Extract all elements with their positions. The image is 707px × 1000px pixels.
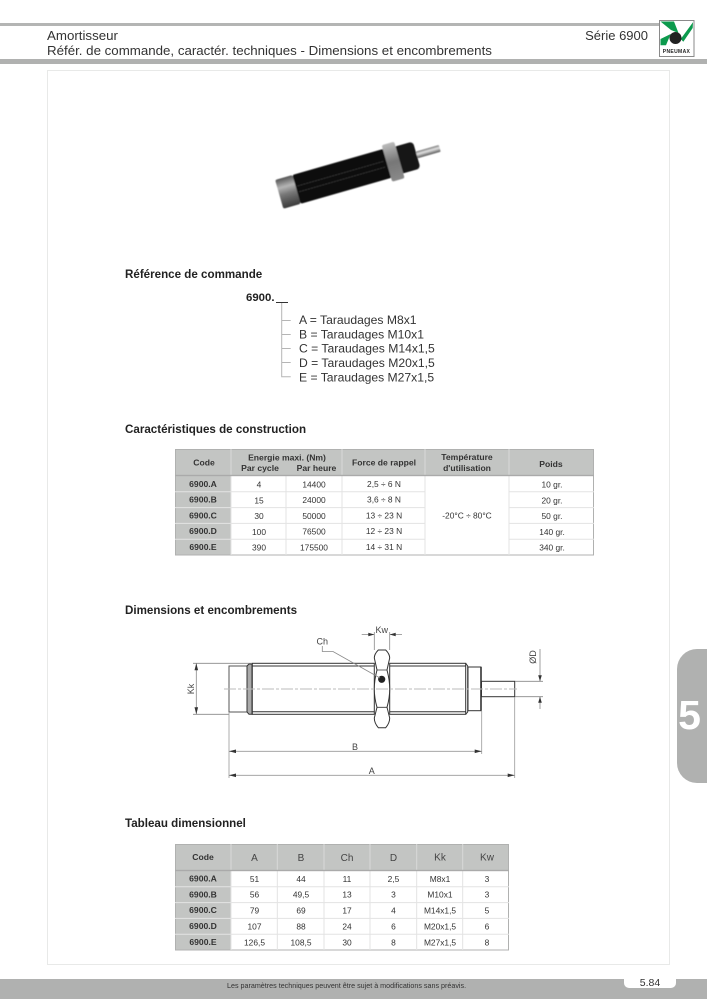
table: dimensions: M8x1 — [430, 874, 451, 884]
table: dimensions: 88 — [296, 922, 306, 932]
table: dimensions: 79 — [250, 906, 259, 916]
table: caractéristiques: 2,5 ÷ 6 N — [367, 479, 401, 489]
table: dimensions: 49,5 — [293, 890, 309, 900]
dimension OD — [515, 649, 543, 709]
table: caractéristiques: 340 gr. — [539, 542, 565, 552]
table: dimensions: M27x1,5 — [424, 938, 456, 948]
table: dimensions: 6 — [391, 922, 396, 932]
table: caractéristiques: d'utilisation — [443, 463, 491, 473]
technical drawing — [186, 625, 543, 778]
table: dimensions: 126,5 — [244, 938, 265, 948]
table: dimensions: 6900.E — [189, 937, 217, 947]
table: caractéristiques: 12 ÷ 23 N — [366, 526, 402, 536]
table: caractéristiques: Code — [193, 458, 215, 468]
table: caractéristiques: 24000 — [302, 495, 326, 505]
page number: 5.84 — [640, 977, 660, 989]
footer note: Les paramètres techniques peuvent être sujet à modifications sans préavis. — [227, 982, 466, 990]
header title block: Référ. de commande, caractér. techniques - Dimensions et encombrements — [47, 43, 492, 58]
heading: dimensions et encombrements: Dimensions et encombrements — [125, 604, 297, 617]
dimension Kw — [362, 625, 402, 650]
header title block: Amortisseur — [47, 28, 118, 42]
table: dimensions: A — [251, 853, 258, 864]
header title block — [47, 28, 492, 58]
header lower band — [0, 59, 707, 64]
table: caractéristiques: 6900.A — [189, 479, 217, 489]
table: dimensions: 69 — [296, 906, 306, 916]
table: dimensions — [175, 844, 509, 950]
table: caractéristiques: 10 gr. — [542, 480, 562, 490]
table: dimensions: 11 — [343, 874, 352, 884]
table: caractéristiques: 6900.B — [189, 494, 217, 504]
table: caractéristiques: 30 — [254, 511, 264, 521]
table: caractéristiques: 6900.D — [189, 526, 217, 536]
order code tree: D = Taraudages M20x1,5 — [299, 356, 435, 370]
table: dimensions: M14x1,5 — [424, 906, 456, 916]
order code tree: 6900. — [246, 292, 275, 304]
table: caractéristiques: 6900.E — [189, 542, 217, 552]
table: dimensions: 107 — [248, 922, 262, 932]
main panel — [47, 70, 670, 965]
table: dimensions: 3 — [391, 890, 396, 900]
table: dimensions: 2,5 — [388, 874, 400, 884]
heading: caractéristiques de construction: Caractéristiques de construction — [125, 423, 306, 436]
table: dimensions: 8 — [485, 938, 490, 948]
table: caractéristiques: 20 gr. — [542, 496, 562, 506]
dimension OD: ØD — [528, 650, 538, 664]
table: caractéristiques: Poids — [539, 459, 563, 469]
heading: tableau dimensionnel: Tableau dimensionnel — [125, 817, 246, 830]
dimension B — [229, 711, 482, 778]
table: dimensions: 6900.D — [189, 921, 217, 931]
table: dimensions: 6900.A — [189, 874, 217, 884]
table: dimensions: Kk — [434, 852, 447, 864]
table: dimensions: Code — [192, 852, 214, 862]
table: dimensions: D — [390, 853, 397, 864]
table: caractéristiques: Force de rappel — [352, 458, 416, 468]
detail dot — [378, 676, 385, 683]
side chapter tab — [677, 649, 707, 783]
table: dimensions: 6 — [485, 922, 490, 932]
table: caractéristiques: 175500 — [300, 542, 328, 552]
dimension Kk: Kk — [186, 683, 196, 694]
series label: Série 6900 — [585, 28, 648, 42]
table: dimensions: 5 — [485, 906, 490, 916]
dimension Ch: Ch — [317, 636, 328, 646]
table: caractéristiques: 3,6 ÷ 8 N — [367, 494, 401, 504]
dimension A — [229, 697, 515, 778]
table: caractéristiques: 100 — [252, 527, 266, 537]
table: dimensions: B — [298, 853, 305, 864]
order code tree: A = Taraudages M8x1 — [299, 313, 417, 327]
table: dimensions: 3 — [485, 874, 490, 884]
table: dimensions: 4 — [391, 906, 396, 916]
table: dimensions: 3 — [485, 890, 490, 900]
table: caractéristiques: 15 — [254, 496, 264, 506]
table: dimensions: 56 — [250, 890, 259, 900]
centre line — [224, 688, 517, 690]
logo: Pneumax: PNEUMAX — [663, 49, 691, 55]
order code tree: B = Taraudages M10x1 — [299, 327, 424, 341]
footer band — [0, 979, 707, 999]
table: dimensions: 24 — [342, 922, 352, 932]
table: caractéristiques: 14400 — [302, 480, 326, 490]
order code tree: E = Taraudages M27x1,5 — [299, 370, 434, 384]
table: dimensions: Kw — [480, 852, 495, 864]
heading: référence de commande: Référence de commande — [125, 268, 262, 281]
order code tree: C = Taraudages M14x1,5 — [299, 342, 435, 356]
shock absorber outline — [229, 650, 515, 728]
table: dimensions: 17 — [342, 906, 352, 916]
table: dimensions: Ch — [341, 853, 353, 864]
table: caractéristiques: 50000 — [302, 511, 326, 521]
dimension Ch — [317, 636, 380, 678]
dimension B: B — [352, 742, 358, 752]
table: caractéristiques: Par cycle — [241, 463, 279, 473]
table: dimensions: M20x1,5 — [424, 922, 456, 932]
table: caractéristiques: 13 ÷ 23 N — [366, 510, 402, 520]
table: caractéristiques: 50 gr. — [542, 511, 562, 521]
dimension A: A — [369, 766, 375, 776]
product photo: shock absorber — [274, 142, 442, 210]
table: caractéristiques: 140 gr. — [539, 527, 565, 537]
table: caractéristiques: 4 — [257, 480, 262, 490]
table: dimensions: M10x1 — [427, 890, 453, 900]
dimension Kw: Kw — [375, 625, 388, 635]
table: dimensions: 6900.B — [189, 890, 217, 900]
table: caractéristiques: 14 ÷ 31 N — [366, 542, 402, 552]
table: dimensions: 13 — [342, 890, 352, 900]
order code tree — [246, 292, 435, 384]
table: caractéristiques: Energie maxi. (Nm) — [248, 452, 326, 462]
table: caractéristiques: 390 — [252, 542, 266, 552]
table: dimensions: 108,5 — [291, 938, 312, 948]
page number tab — [624, 979, 676, 988]
dimension Kk — [186, 663, 252, 714]
table: dimensions: 44 — [296, 874, 306, 884]
table: caractéristiques: Par heure — [297, 463, 337, 473]
table: dimensions: 8 — [391, 938, 396, 948]
logo: Pneumax — [659, 20, 694, 57]
table: caractéristiques: 76500 — [302, 526, 326, 536]
table: caractéristiques: 6900.C — [189, 510, 217, 520]
table: dimensions: 30 — [342, 938, 352, 948]
header top rule — [0, 23, 659, 26]
table: dimensions: 6900.C — [189, 905, 217, 915]
table: caractéristiques — [175, 449, 594, 556]
table: caractéristiques: -20°C ÷ 80°C — [442, 510, 492, 520]
table: dimensions: 51 — [250, 874, 259, 884]
chapter number: 5 — [678, 692, 701, 738]
table: caractéristiques: Température — [441, 452, 493, 462]
